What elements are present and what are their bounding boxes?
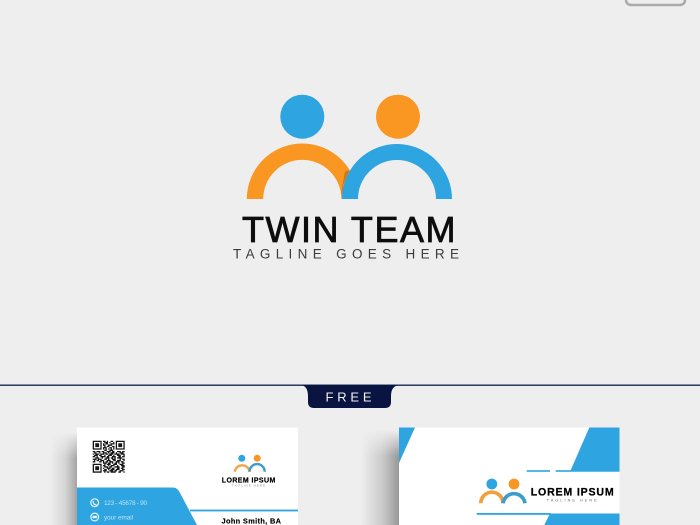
icon: QR code (93, 441, 125, 473)
free label: FREE (326, 389, 372, 404)
top-right blue block (570, 428, 620, 472)
panel: left business card (77, 428, 298, 525)
icon: orange person head (376, 95, 420, 139)
icon: blue person head (280, 95, 324, 139)
blue rule (477, 513, 551, 515)
card background (399, 428, 620, 525)
title: TWIN TEAM (242, 209, 456, 250)
tagline: TAGLINE GOES HERE (233, 246, 459, 261)
email: your email (104, 514, 133, 521)
logo name: LOREM IPSUM (531, 486, 614, 498)
bottom-right blue block (544, 514, 620, 525)
mini logo (222, 455, 275, 488)
right card shadow (361, 430, 399, 525)
panel: right business card (399, 428, 620, 525)
icon: email (91, 513, 99, 521)
card background (77, 428, 298, 525)
free tab (302, 385, 398, 408)
top-left blue corner (399, 428, 415, 463)
icon: blue person body arc (350, 152, 444, 199)
divider line with free tab (0, 384, 700, 408)
icon: orange person body arc (255, 152, 350, 199)
main logo (233, 95, 459, 261)
phone number: 123 - 45678 - 90 (104, 500, 147, 507)
mini logo tagline: TAGLINE HERE (232, 484, 265, 488)
mini logo name: LOREM IPSUM (222, 477, 275, 484)
icon: arc overlap shadow (342, 170, 350, 198)
top-right frame fragment (626, 0, 685, 5)
dash accents (527, 470, 571, 472)
logo lockup (481, 479, 614, 503)
contact panel (77, 488, 197, 525)
left card shadow (50, 432, 77, 525)
logo tagline: TAGLINE HERE (547, 498, 597, 502)
blue rule (190, 510, 298, 511)
icon: phone (91, 499, 99, 507)
